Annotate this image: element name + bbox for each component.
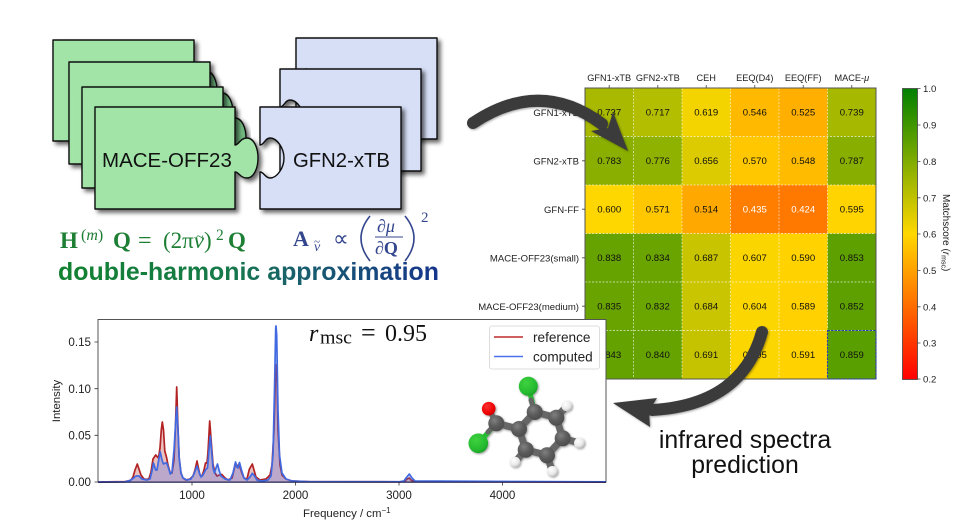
colorbar: 0.8: [923, 157, 936, 168]
card 4 front: [95, 107, 258, 209]
equation: IR intensity: A: [293, 226, 309, 251]
equation: eigenvalue problem: H: [60, 228, 78, 253]
equation: IR intensity: 2: [421, 210, 428, 226]
heatmap values: 0.570: [743, 156, 767, 167]
heatmap values: 0.737: [597, 108, 621, 119]
x tick labels: 3000: [386, 489, 412, 502]
colorbar: 1.0: [923, 84, 936, 95]
heatmap values: 0.607: [743, 253, 767, 264]
heatmap column labels: GFN1-xTB: [587, 73, 631, 83]
score annotation: r: [309, 321, 319, 347]
heatmap values: 0.589: [791, 302, 815, 312]
arrow: to spectrum: [613, 332, 762, 427]
heatmap column labels: [587, 73, 869, 83]
heatmap values: 0.595: [840, 204, 864, 216]
heatmap row labels: GFN-FF: [544, 205, 579, 216]
x axis label: Frequency / cm: [303, 508, 382, 520]
equation: eigenvalue problem: Q: [113, 228, 131, 253]
heatmap values: 0.739: [840, 108, 864, 119]
y tick labels: [68, 336, 91, 489]
score annotation: 0.95: [385, 321, 427, 347]
equation: eigenvalue problem: (m): [81, 227, 103, 244]
spectrum chart: [51, 318, 606, 520]
score annotation: [309, 318, 427, 348]
colorbar: 0.6: [923, 230, 936, 240]
y tick labels: 0.15: [68, 336, 91, 349]
equation: eigenvalue problem: (2πν): [163, 228, 212, 253]
card 2: [210, 93, 233, 133]
score annotation: =: [361, 318, 376, 347]
equation: IR intensity: ∂μ: [377, 216, 395, 236]
x tick labels: 2000: [283, 489, 308, 502]
heatmap values: 0.604: [743, 302, 767, 312]
heatmap values: 0.834: [646, 253, 670, 264]
legend: computed: [533, 350, 593, 364]
card 1: [194, 71, 217, 111]
heatmap values: 0.546: [743, 108, 767, 119]
equation: eigenvalue problem: [60, 227, 246, 254]
heatmap values: 0.514: [694, 204, 719, 216]
heatmap values: 0.600: [597, 204, 621, 216]
blue card 3 front: [260, 107, 401, 209]
heatmap values: 0.859: [840, 350, 864, 361]
heatmap row labels: GFN1-xTB: [533, 108, 579, 119]
blue puzzle card stack: [260, 38, 437, 209]
best cell highlight: [828, 330, 876, 379]
x tick labels: 4000: [490, 489, 515, 502]
heatmap values: 0.684: [694, 302, 719, 312]
reference spectrum: [98, 365, 606, 482]
equation: eigenvalue problem: Q: [228, 228, 246, 253]
heatmap values: 0.525: [791, 108, 815, 119]
plot area: [98, 320, 606, 482]
colorbar title: Matchscore ( r: [940, 194, 951, 255]
score annotation: msc: [320, 328, 352, 348]
heatmap values: 0.853: [840, 253, 864, 264]
legend: [490, 326, 600, 369]
caption: infrared spectra prediction: infrared spectra: [659, 427, 831, 454]
y tick labels: 0.05: [68, 430, 91, 442]
heatmap values: 0.840: [646, 350, 670, 361]
equation: IR intensity: ∂Q: [375, 238, 398, 258]
legend: reference: [533, 330, 590, 345]
colorbar: 0.9: [923, 120, 936, 132]
equation: IR intensity: ~: [314, 236, 320, 248]
x tick labels: [179, 489, 515, 502]
blue card 1: [296, 38, 437, 139]
heatmap values: 0.548: [791, 156, 815, 167]
heatmap values: 0.843: [597, 350, 621, 361]
heatmap values: [597, 108, 864, 361]
equation: IR intensity: [293, 210, 428, 261]
heatmap values: 0.687: [694, 253, 718, 264]
heatmap values: 0.717: [646, 108, 670, 119]
heatmap column labels: EEQ(D4): [736, 73, 773, 83]
arrow: to heatmap: [473, 101, 628, 151]
equation: IR intensity: ν: [314, 240, 321, 255]
heatmap values: 0.838: [597, 253, 621, 264]
heatmap values: 0.571: [646, 204, 670, 216]
heatmap column labels: GFN2-xTB: [636, 73, 680, 83]
heatmap row labels: MACE-OFF23(large): [491, 350, 579, 362]
colorbar title: msc: [940, 255, 946, 268]
y tick labels: 0.10: [68, 383, 91, 396]
x tick labels: 1000: [179, 489, 205, 502]
heatmap values: 0.605: [743, 350, 767, 361]
colorbar: 0.7: [923, 194, 936, 204]
y axis label: Intensity: [51, 379, 63, 422]
equation: IR intensity: ∝: [333, 227, 349, 252]
y tick labels: 0.00: [68, 476, 91, 489]
heatmap values: 0.591: [791, 350, 815, 361]
colorbar: 0.5: [923, 266, 936, 277]
heatmap values: 0.783: [597, 156, 621, 167]
card 3: [223, 118, 246, 158]
heatmap values: 0.590: [791, 253, 815, 264]
equation: eigenvalue problem: ~: [196, 230, 204, 245]
heatmap row labels: MACE-OFF23(medium): [478, 302, 579, 313]
colorbar: 0.3: [923, 338, 936, 350]
heatmap cells: [585, 88, 876, 379]
heatmap row labels: MACE-OFF23(small): [490, 254, 579, 264]
heatmap panel: [478, 73, 876, 379]
caption: infrared spectra prediction: prediction: [691, 452, 799, 479]
heatmap values: 0.852: [840, 302, 864, 312]
heatmap column labels: EEQ(FF): [785, 73, 822, 83]
colorbar: 0.2: [923, 374, 936, 386]
equation: eigenvalue problem: 2: [216, 227, 224, 244]
heatmap values: 0.787: [840, 156, 864, 167]
colorbar: 0.4: [923, 302, 937, 314]
green puzzle card stack: [53, 40, 258, 209]
colorbar title: ): [940, 268, 951, 271]
heatmap column labels: MACE-μ: [834, 73, 869, 83]
heatmap values: 0.776: [646, 156, 670, 167]
heatmap row labels: GFN2-xTB: [533, 156, 579, 168]
heatmap values: 0.691: [694, 350, 718, 361]
MACE-OFF23 label: MACE-OFF23: [102, 149, 232, 172]
title: double-harmonic approximation: double-harmonic approximation: [58, 258, 439, 286]
heatmap values: 0.832: [646, 302, 670, 312]
caption: infrared spectra prediction: [659, 427, 831, 479]
equation: eigenvalue problem: =: [138, 228, 152, 254]
heatmap values: 0.424: [791, 204, 816, 216]
heatmap row labels: [478, 108, 579, 362]
colorbar: [902, 84, 951, 386]
x axis label: −1: [382, 506, 391, 515]
heatmap values: 0.435: [743, 204, 767, 216]
heatmap values: 0.835: [597, 302, 621, 312]
heatmap column labels: CEH: [696, 73, 716, 83]
GFN2-xTB label: GFN2-xTB: [293, 150, 390, 172]
computed spectrum: [98, 326, 606, 482]
molecule: [468, 377, 585, 477]
heatmap values: 0.619: [694, 108, 718, 119]
blue card 2: [280, 69, 421, 171]
heatmap values: 0.656: [694, 156, 718, 167]
